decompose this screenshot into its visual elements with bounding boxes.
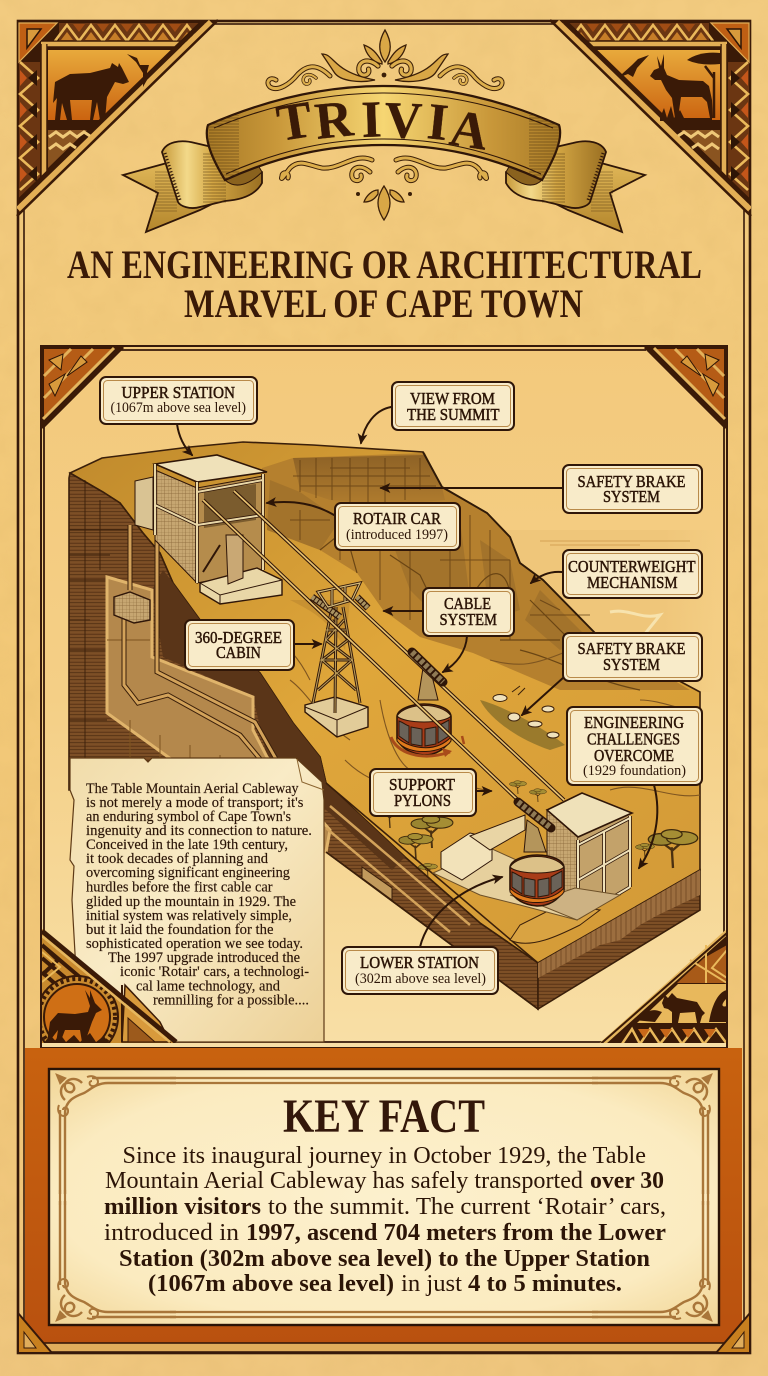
- key fact body: Since its inaugural journey in October 1929, the Table: [122, 1143, 646, 1169]
- key fact body: Station (302m above sea level) to the Upper Station: [119, 1246, 650, 1272]
- icon: acacia tree: [705, 66, 714, 118]
- label: view from the summit: THE SUMMIT: [407, 405, 500, 424]
- scroll text panel: ingenuity and its connection to nature.: [86, 823, 312, 839]
- cables: [203, 491, 564, 828]
- icon: bird on branch: [127, 54, 149, 87]
- scroll text panel: initial system was relatively simple,: [86, 908, 292, 924]
- key fact body: in just: [401, 1271, 462, 1297]
- label: support pylons: [370, 769, 476, 816]
- scroll text panel: is not merely a mode of transport; it's: [86, 795, 304, 811]
- corner ornament: top right antelope: [550, 20, 751, 216]
- arrows: [177, 407, 657, 947]
- terrain: table mountain cliff: [262, 452, 700, 796]
- scroll text panel: glided up the mountain in 1929. The: [86, 894, 296, 910]
- panel corner: top left: [41, 346, 123, 428]
- scroll text panel: [70, 758, 324, 1042]
- scroll text panel: hurdles before the first cable car: [86, 880, 273, 896]
- title: TRIVIA: [273, 90, 493, 162]
- panel: cableway illustration: [36, 346, 727, 1058]
- label: counterweight mechanism: MECHANISM: [587, 573, 678, 592]
- key fact body: Mountain Aerial Cableway has safely transported: [105, 1168, 583, 1194]
- label: safety brake system upper: [563, 465, 702, 513]
- label: safety brake system lower: [563, 633, 702, 681]
- panel corner: bottom left antelope: [42, 929, 178, 1043]
- counterweight block: [114, 592, 150, 623]
- scroll text panel: overcoming significant engineering: [86, 865, 290, 881]
- label: safety brake system upper: SYSTEM: [603, 487, 660, 506]
- cable car: upper: [391, 668, 464, 757]
- label: lower station: [342, 947, 498, 994]
- label: 360-degree cabin: 360-DEGREE: [195, 628, 282, 647]
- distant sea: [505, 530, 716, 692]
- section: mountain cross-section: [69, 473, 538, 1009]
- ornament: top filigree: [268, 30, 502, 89]
- ribbon tails: [123, 150, 240, 232]
- scroll text panel: remnilling for a possible....: [153, 993, 309, 1009]
- scroll text panel: The Table Mountain Aerial Cableway: [86, 781, 299, 797]
- icon: wildebeest silhouette: [53, 63, 129, 120]
- icon: wildebeest silhouette: [662, 993, 705, 1023]
- heading: [67, 242, 702, 326]
- key fact ornamental border: [56, 1074, 712, 1321]
- scroll text panel: cal lame technology, and: [136, 978, 281, 994]
- label: safety brake system lower: SYSTEM: [603, 655, 660, 674]
- scroll text panel: it took decades of planning and: [86, 851, 269, 867]
- label: 360-degree cabin: CABIN: [216, 643, 261, 662]
- panel: key fact band: [18, 1048, 750, 1353]
- icon: antelope silhouette: [650, 54, 713, 118]
- key fact body: to the summit. The current ‘Rotair’ cars,: [268, 1194, 666, 1220]
- label: cable system: CABLE: [444, 594, 491, 613]
- scroll text panel: sophisticated operation we see today.: [86, 936, 303, 952]
- icon: flying bird: [620, 55, 649, 77]
- label: upper station: [100, 377, 257, 424]
- key fact body: (1067m above sea level): [148, 1271, 394, 1297]
- label: engineering challenges: [567, 707, 702, 785]
- key fact body: million visitors: [104, 1194, 261, 1220]
- icon: antelope in circle: [47, 990, 102, 1043]
- heading: MARVEL OF CAPE TOWN: [184, 281, 583, 326]
- label: engineering challenges: CHALLENGES: [587, 730, 680, 748]
- support pylon: [305, 583, 368, 737]
- scroll text panel: but it laid the foundation for the: [86, 922, 274, 938]
- trees: [376, 781, 698, 878]
- scroll text panel: Conceived in the late 19th century,: [86, 837, 288, 853]
- terrain: boulders: [480, 686, 565, 750]
- panel corner: bottom right animal: [595, 930, 727, 1048]
- key fact body: 4 to 5 minutes.: [468, 1271, 622, 1297]
- corner ornament: top left wildebeest: [17, 20, 218, 216]
- panel corner: top right: [645, 346, 727, 428]
- label: engineering challenges: (1929 foundation): [583, 763, 686, 779]
- ribbon banner: [123, 86, 645, 232]
- key fact body: 1997, ascend 704 meters from the Lower: [246, 1220, 666, 1246]
- label: counterweight mechanism: [563, 550, 702, 598]
- label: safety brake system lower: SAFETY BRAKE: [578, 639, 686, 658]
- label: lower station: (302m above sea level): [355, 971, 486, 987]
- label: safety brake system upper: SAFETY BRAKE: [578, 472, 686, 491]
- label: rotair car: (introduced 1997): [346, 527, 448, 543]
- upper station: [135, 455, 282, 604]
- inner shaft chamber: [107, 577, 330, 852]
- key fact heading: KEY FACT: [283, 1090, 485, 1143]
- scroll text panel: iconic 'Rotair' cars, a technologi-: [120, 964, 309, 980]
- label: rotair car: ROTAIR CAR: [353, 509, 442, 528]
- scroll text panel: an enduring symbol of Cape Town's: [86, 809, 291, 825]
- label: cable system: [423, 588, 514, 636]
- ribbon main band: [207, 86, 560, 180]
- ornament: lower filigree: [281, 158, 487, 220]
- label: view from the summit: VIEW FROM: [410, 389, 495, 408]
- key fact body: [104, 1143, 666, 1297]
- cable car: lower: [510, 820, 564, 906]
- label: cable system: SYSTEM: [440, 610, 497, 629]
- label: 360-degree cabin: [185, 620, 294, 670]
- label: support pylons: PYLONS: [394, 791, 451, 810]
- label: view from the summit: [392, 382, 514, 430]
- label: upper station: (1067m above sea level): [110, 400, 246, 416]
- label: upper station: UPPER STATION: [122, 383, 235, 402]
- lower station: [433, 793, 632, 920]
- key fact body: introduced in: [104, 1220, 239, 1246]
- ribbon folds: [162, 141, 262, 208]
- grass: [660, 106, 712, 121]
- terrain: front face of block: [326, 783, 700, 1009]
- terrain: hillside surface: [70, 442, 700, 963]
- label: rotair car: [335, 503, 460, 550]
- label: lower station: LOWER STATION: [360, 953, 479, 972]
- label: counterweight mechanism: COUNTERWEIGHT: [568, 557, 696, 576]
- scroll text panel: The 1997 upgrade introduced the: [108, 950, 300, 966]
- label: support pylons: SUPPORT: [389, 775, 456, 794]
- label: engineering challenges: ENGINEERING: [584, 713, 684, 732]
- key fact body: over 30: [590, 1168, 664, 1194]
- label: engineering challenges: OVERCOME: [594, 746, 674, 765]
- pipes: [124, 515, 305, 810]
